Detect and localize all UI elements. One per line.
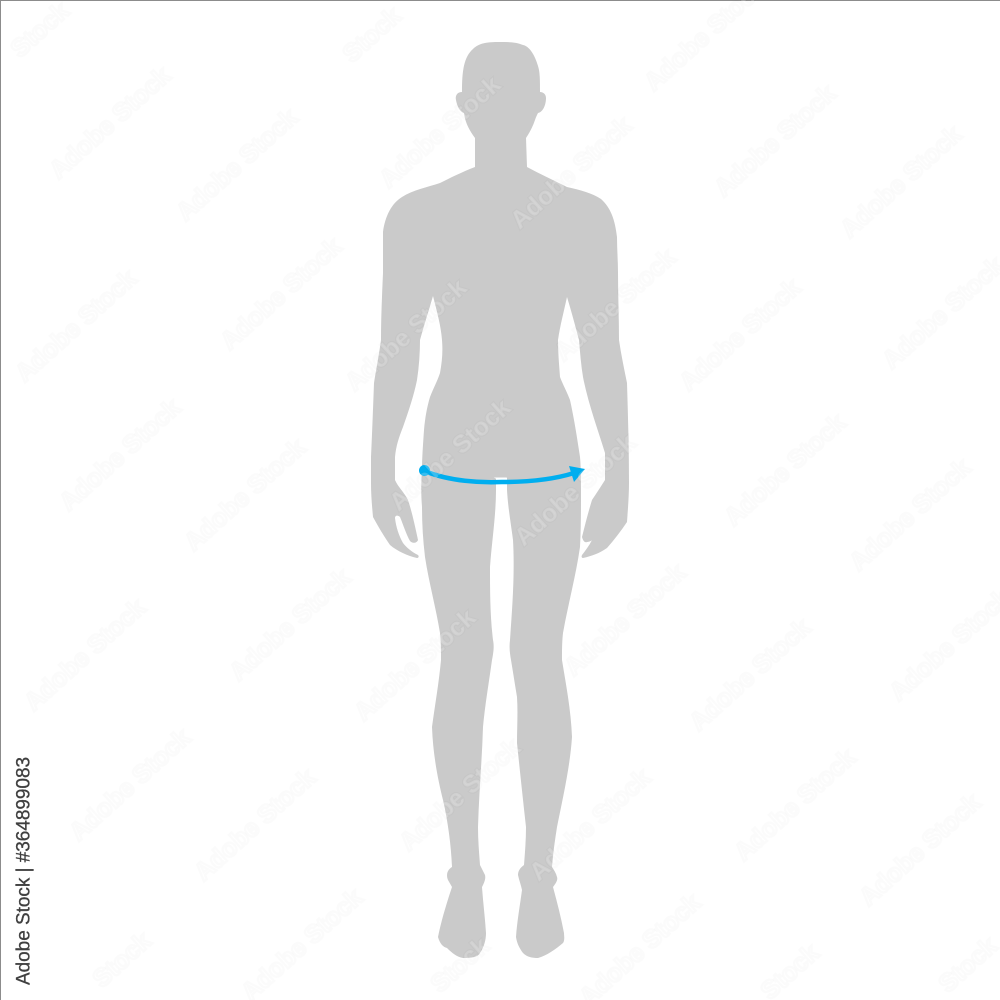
repeating stock watermark: Adobe Stock bbox=[729, 743, 861, 867]
repeating stock watermark: Stock bbox=[87, 927, 157, 993]
vertical stock id label: Adobe Stock | #364899083 bbox=[14, 757, 34, 985]
repeating stock watermark: Adobe Stock bbox=[524, 763, 656, 887]
repeating stock watermark: Adobe Stock bbox=[384, 393, 516, 517]
repeating stock watermark: Adobe Stock bbox=[54, 393, 186, 517]
human body silhouette bbox=[371, 42, 629, 958]
repeating stock watermark: Adobe Stock bbox=[559, 558, 691, 682]
repeating stock watermark: Adobe Stock bbox=[10, 264, 142, 388]
repeating stock watermark: Adobe Stock bbox=[374, 70, 506, 194]
repeating stock watermark: Adobe Stock bbox=[674, 273, 806, 397]
hip measurement arrow bbox=[419, 465, 585, 482]
repeating stock watermark: Adobe Stock bbox=[171, 103, 303, 227]
repeating stock watermark: Adobe Stock bbox=[719, 408, 851, 532]
repeating stock watermark: Stock bbox=[337, 2, 407, 68]
arrow head bbox=[569, 466, 585, 482]
arrow curve bbox=[427, 472, 574, 482]
repeating stock watermark: Adobe Stock bbox=[224, 563, 356, 687]
repeating stock watermark: Adobe Stock bbox=[179, 433, 311, 557]
repeating stock watermark: Adobe Stock bbox=[349, 603, 481, 727]
repeating stock watermark: Adobe Stock bbox=[340, 273, 472, 397]
repeating stock watermark: Adobe Stock bbox=[854, 788, 986, 912]
repeating stock watermark: Adobe Stock bbox=[549, 243, 681, 367]
repeating stock watermark: Adobe Stock bbox=[505, 111, 637, 235]
repeating stock watermark: Adobe Stock bbox=[44, 61, 176, 185]
repeating stock watermark: Adobe Stock bbox=[835, 120, 967, 244]
repeating stock watermark: Adobe Stock bbox=[64, 723, 196, 847]
torso, head and arms silhouette bbox=[371, 42, 629, 958]
repeating stock watermark: Adobe Stock bbox=[844, 453, 976, 577]
repeating stock watermark: Adobe Stock bbox=[189, 763, 321, 887]
repeating stock watermark: Stock bbox=[425, 932, 495, 998]
repeating stock watermark: Adobe Stock bbox=[394, 733, 526, 857]
repeating stock watermark: Adobe Stock bbox=[215, 232, 347, 356]
repeating stock watermark: Adobe Stock bbox=[684, 613, 816, 737]
crotch highlight bbox=[494, 478, 507, 479]
repeating stock watermark: Adobe Stock bbox=[709, 79, 841, 203]
repeating stock watermark: Adobe Stock bbox=[19, 593, 151, 717]
arrow start dot bbox=[419, 465, 430, 476]
repeating stock watermark: Adobe Stock bbox=[509, 428, 641, 552]
